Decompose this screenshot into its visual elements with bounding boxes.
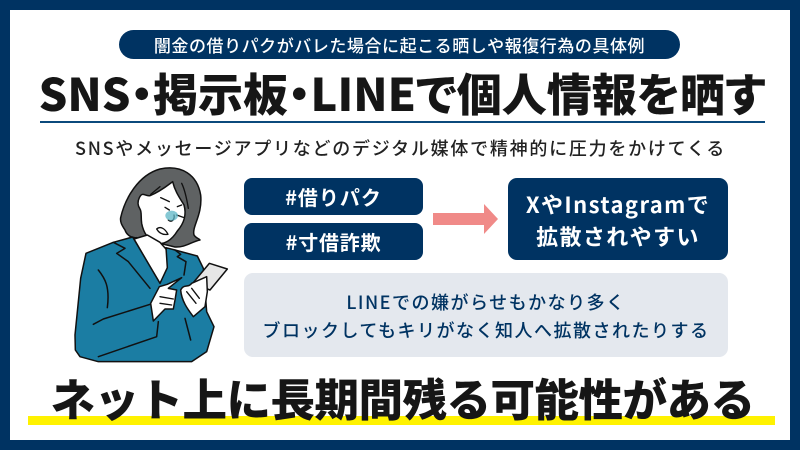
hair [121,168,201,247]
title rule [40,121,765,123]
mouth [157,228,168,234]
tear [165,211,178,221]
lapel right [175,250,186,275]
panel: LINE harassment note: ブロックしてもキリがなく知人へ拡散されたりする [262,317,710,343]
heading pill: 闇金の借りパクがバレた場合に起こる晒しや報復行為の具体例 [154,32,645,57]
highlight underline [28,416,775,425]
panel: LINE harassment note: LINEでの嫌がらせもかなり多く [346,289,626,315]
phone [193,263,227,290]
jacket [75,237,214,362]
eyebrows and nose [151,183,188,221]
finger lines [160,288,199,305]
neck and shirt [134,235,168,283]
callout: spread on X and Instagram [508,178,728,260]
tag: 借りパク: #借りパク [285,182,382,211]
callout: spread on X and Instagram: 拡散されやすい [536,220,700,252]
tag: 寸借詐欺 [244,223,423,260]
tag: 寸借詐欺: #寸借詐欺 [286,227,381,256]
conclusion text: ネット上に長期間残る可能性がある [50,364,754,429]
panel: LINE harassment note [244,273,728,357]
lapel left [113,242,150,288]
phone hand [181,277,207,317]
sleeve line [93,270,191,357]
subtitle: SNSやメッセージアプリなどのデジタル媒体で精神的に圧力をかけてくる [75,135,726,161]
arrow [433,204,498,234]
pointing hand [151,278,182,321]
face [138,182,185,243]
main title: SNS・掲示板・LINEで個人情報を晒す [39,59,765,124]
illustration: crying woman with smartphone [74,167,228,362]
callout: spread on X and Instagram: XやInstagramで [526,188,710,220]
tag: 借りパク [244,178,423,215]
